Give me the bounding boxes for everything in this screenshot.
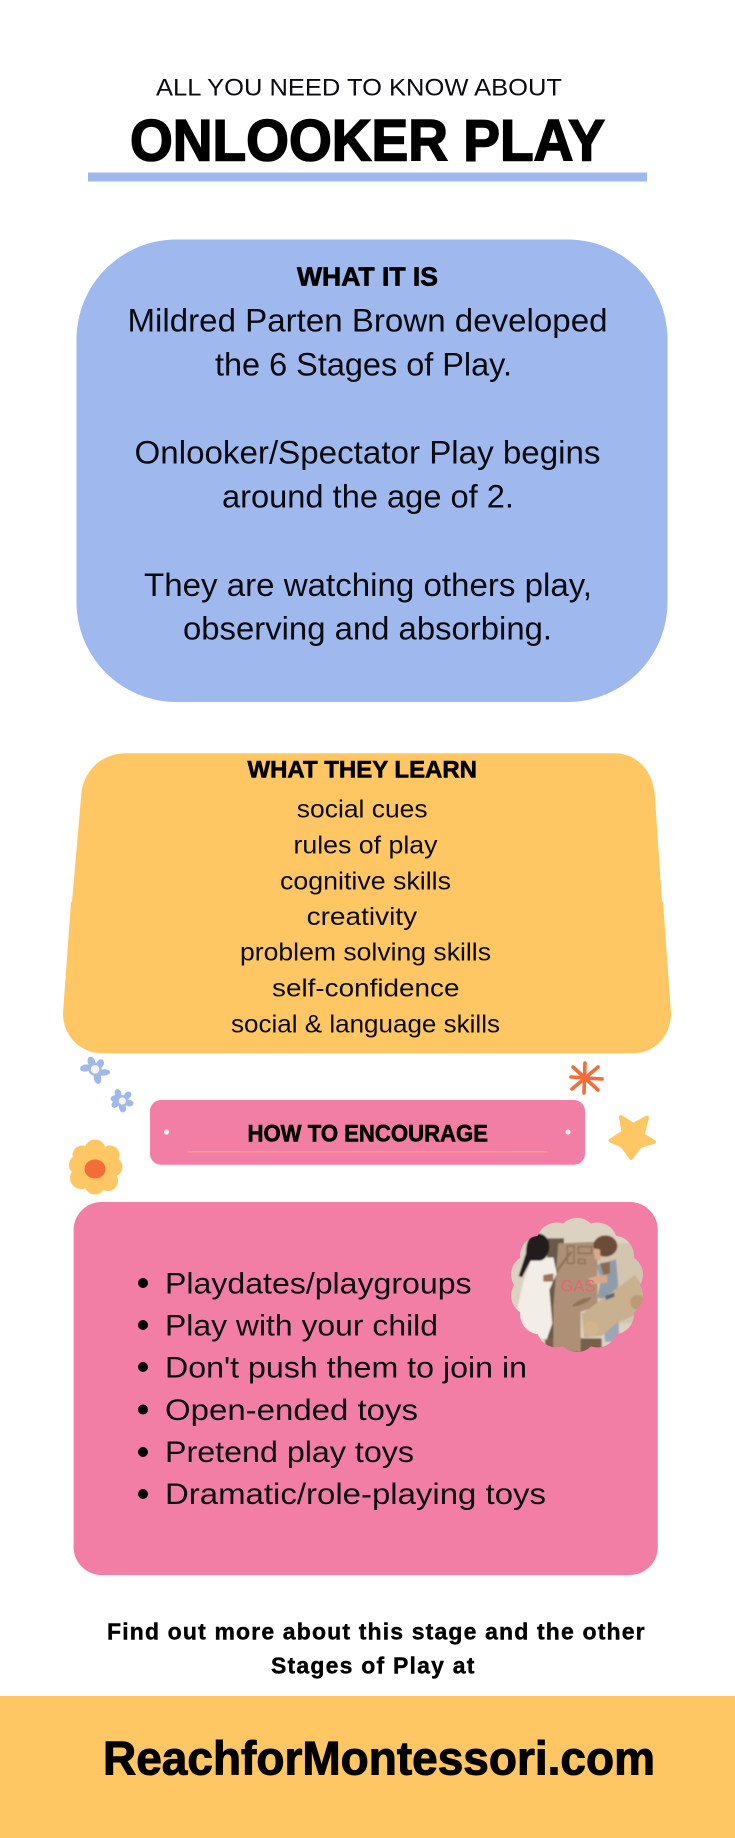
- bullet list: Open-ended toys: [165, 1394, 418, 1427]
- kicker text: ALL YOU NEED TO KNOW ABOUT: [156, 74, 562, 102]
- heading: what they learn: WHAT THEY LEARN: [248, 756, 477, 783]
- text: watching others: observing and absorbing.: [183, 611, 552, 647]
- main title: ONLOOKER PLAY: [130, 109, 605, 174]
- bullet list: Dramatic/role-playing toys: [165, 1478, 546, 1511]
- photo: children playing with cardboard gas pump: [511, 1218, 643, 1352]
- panel: how to encourage banner: [150, 1100, 585, 1165]
- photo lettering: GAS: GAS: [561, 1277, 595, 1296]
- text: age it begins: around the age of 2.: [222, 478, 514, 514]
- bullet list: [138, 1267, 546, 1511]
- list of skills: creativity: [307, 903, 418, 931]
- banner underline: [188, 1151, 548, 1152]
- bullet list: Play with your child: [165, 1310, 438, 1342]
- text: find out more: Find out more about this stage and the other: [107, 1619, 645, 1645]
- list of skills: [231, 796, 500, 1039]
- bullet list: Pretend play toys: [165, 1436, 414, 1469]
- footer band: [0, 1696, 735, 1838]
- panel: encouragement list: [74, 1202, 658, 1575]
- icon: smaller blue flower: [110, 1088, 134, 1113]
- footer website: ReachforMontessori.com: [103, 1732, 655, 1785]
- icon: yellow star: [610, 1117, 654, 1158]
- list of skills: rules of play: [294, 831, 438, 859]
- text: watching others: They are watching others play,: [144, 567, 592, 603]
- text: stages of play: the 6 Stages of Play.: [215, 347, 512, 383]
- title block: [88, 74, 647, 182]
- bullet list: Don't push them to join in: [165, 1352, 527, 1385]
- text: stages of play: [128, 302, 608, 383]
- list of skills: problem solving skills: [240, 939, 491, 967]
- text: age it begins: Onlooker/Spectator Play begins: [134, 435, 600, 471]
- panel: what they learn: [63, 753, 671, 1053]
- text: find out more: [107, 1619, 645, 1678]
- banner dots: [164, 1129, 571, 1135]
- panel: what it is: [76, 240, 668, 702]
- list of skills: self-confidence: [272, 975, 460, 1003]
- list of skills: social & language skills: [231, 1011, 500, 1039]
- list of skills: cognitive skills: [280, 867, 451, 895]
- icon: orange asterisk: [571, 1063, 602, 1093]
- list of skills: social cues: [297, 796, 428, 824]
- text: age it begins: [134, 435, 600, 514]
- icon: small blue flower: [79, 1056, 110, 1085]
- text: stages of play: Mildred Parten Brown developed: [128, 302, 608, 338]
- heading: how to encourage: HOW TO ENCOURAGE: [248, 1121, 488, 1148]
- heading: what it is: WHAT IT IS: [297, 262, 438, 292]
- title underline: [88, 172, 647, 182]
- icon: orange flower: [69, 1140, 122, 1194]
- bullet list: Playdates/playgroups: [165, 1267, 472, 1300]
- text: find out more: Stages of Play at: [271, 1652, 475, 1678]
- text: watching others: [144, 567, 592, 647]
